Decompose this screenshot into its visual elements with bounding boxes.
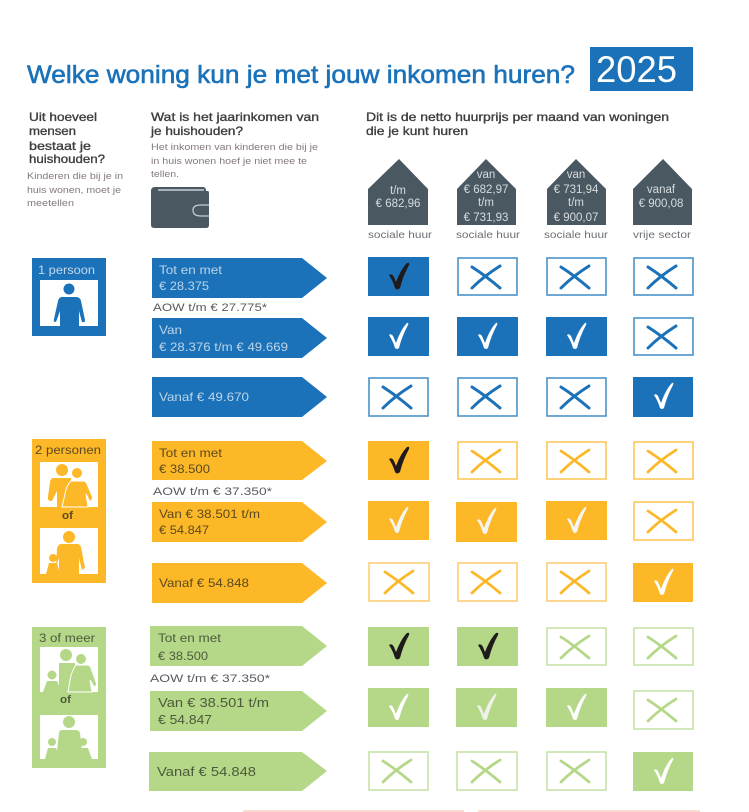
cell: check: [368, 627, 429, 666]
house: rent up to 682,96: [368, 159, 433, 241]
income arrow: blue 28.376 to 49.669: [152, 318, 327, 358]
column heading: household size: Kinderen die bij je in: [27, 171, 123, 182]
column heading: household size: Uit hoeveel: [29, 110, 97, 124]
house: rent 731,94 to 900,07: € 900,07: [554, 212, 598, 224]
panel: 1 persoon: [32, 258, 106, 336]
house: rent up to 682,96: € 682,96: [376, 198, 420, 210]
house: rent 731,94 to 900,07: € 731,94: [554, 184, 599, 196]
column heading: yearly income: [150, 110, 319, 180]
income arrow: orange up to 38.500: € 38.500: [159, 462, 210, 476]
orange row 1 marks: [368, 441, 693, 480]
cell: check: [546, 317, 607, 356]
column heading: household size: huis wonen, moet je: [27, 185, 121, 196]
house: rent 682,97 to 731,93: [456, 159, 521, 241]
house: rent up to 682,96: t/m: [390, 185, 406, 197]
column heading: yearly income: Wat is het jaarinkomen van: [151, 110, 319, 124]
house: rent from 900,08: vanaf: [647, 184, 676, 196]
cell: cross: [369, 563, 429, 601]
house: rent 731,94 to 900,07: [544, 159, 609, 241]
cell: cross: [457, 752, 517, 790]
income arrow: orange 38.501 to 54.847: Van € 38.501 t/m: [159, 507, 260, 521]
panel: 2 personen: of: [62, 510, 73, 522]
cell: check: [368, 441, 429, 480]
blue row 1 marks: [368, 257, 693, 296]
cell: cross: [634, 502, 693, 540]
cell: check: [368, 317, 429, 356]
cell: cross: [547, 378, 606, 416]
income arrow: orange from 54.848: Vanaf € 54.848: [159, 576, 249, 590]
income arrow: green 38.501 to 54.847: [150, 691, 327, 731]
column heading: household size: [27, 110, 123, 209]
cell: check: [546, 688, 607, 727]
column heading: net rent: [366, 110, 669, 138]
cell: check: [633, 752, 693, 791]
cell: check: [633, 377, 693, 417]
cell: cross: [458, 378, 517, 416]
income arrow: blue up to 28.375: [152, 258, 327, 298]
income arrow: green up to 38.500: Tot en met: [158, 631, 222, 645]
panel: 3 of meer: of: [60, 694, 71, 706]
green row 3 marks: [369, 752, 693, 791]
house: rent 682,97 to 731,93: sociale huur: [456, 229, 521, 241]
cell: check: [546, 501, 607, 540]
orange row 2 marks: [368, 501, 693, 542]
house: rent 731,94 to 900,07: t/m: [568, 197, 584, 209]
house: rent 682,97 to 731,93: van: [477, 169, 495, 181]
cell: cross: [369, 752, 428, 790]
income arrow: blue 28.376 to 49.669: Van: [159, 323, 182, 337]
house: rent from 900,08: [633, 159, 692, 241]
income arrow: blue 28.376 to 49.669: € 28.376 t/m € 49.669: [159, 340, 288, 354]
column heading: household size: meetellen: [27, 198, 74, 209]
house: rent from 900,08: vrije sector: [633, 229, 692, 241]
income arrow: orange from 54.848: [152, 563, 327, 603]
footer panels cut off at bottom edge: [243, 810, 700, 812]
income arrow: orange 38.501 to 54.847: [152, 502, 327, 542]
column heading: yearly income: in huis wonen hoef je niet mee te: [151, 156, 307, 167]
panel: 1 persoon: 1 persoon: [38, 265, 95, 277]
house: rent 731,94 to 900,07: sociale huur: [544, 229, 609, 241]
cell: cross: [634, 691, 693, 729]
cell: check: [456, 688, 517, 727]
cell: cross: [369, 378, 428, 416]
cell: cross: [634, 258, 693, 295]
panel: 3 of meer: 3 of meer: [39, 633, 95, 645]
income arrow: green from 54.848: [149, 752, 327, 791]
income arrow: blue up to 28.375: Tot en met: [159, 263, 223, 277]
cell: cross: [458, 442, 517, 479]
column heading: household size: huishouden?: [29, 152, 105, 166]
income arrow: green 38.501 to 54.847: € 54.847: [158, 712, 212, 727]
column heading: yearly income: je huishouden?: [150, 124, 243, 138]
cell: check: [633, 563, 693, 602]
column heading: household size: mensen: [29, 124, 76, 138]
title: Welke woning kun je met jouw inkomen huren?: [27, 61, 575, 89]
cell: check: [368, 257, 429, 296]
house: rent from 900,08: € 900,08: [639, 198, 683, 210]
green row 2 marks: [368, 688, 693, 729]
green row 1 marks: [368, 627, 693, 666]
income arrow: blue up to 28.375: € 28.375: [159, 279, 209, 293]
cell: cross: [634, 318, 693, 355]
income arrow: green up to 38.500: [150, 626, 327, 666]
house: rent 682,97 to 731,93: € 682,97: [464, 184, 508, 196]
cell: cross: [547, 442, 606, 479]
column heading: household size: bestaat je: [29, 139, 91, 153]
cell: check: [368, 688, 429, 727]
cell: cross: [634, 442, 693, 479]
blue row 3 marks: [369, 377, 693, 417]
note: AOW 37.350: AOW t/m € 37.350*: [153, 486, 273, 498]
cell: cross: [634, 628, 693, 665]
house: rent 682,97 to 731,93: € 731,93: [464, 212, 508, 224]
cell: cross: [547, 628, 606, 665]
house: rent 731,94 to 900,07: van: [567, 169, 585, 181]
orange row 3 marks: [369, 563, 693, 602]
cell: check: [368, 501, 429, 540]
income arrow: orange up to 38.500: Tot en met: [159, 446, 223, 460]
income arrow: orange 38.501 to 54.847: € 54.847: [159, 523, 209, 537]
blue row 2 marks: [368, 317, 693, 356]
column heading: net rent: Dit is de netto huurprijs per maand van woningen: [366, 110, 669, 124]
icon: wallet: [151, 187, 209, 228]
cell: cross: [547, 752, 606, 790]
income arrow: orange up to 38.500: [152, 441, 327, 480]
income arrow: green from 54.848: Vanaf € 54.848: [157, 764, 256, 779]
income arrow: blue from 49.670: [152, 377, 327, 417]
cell: cross: [547, 258, 606, 295]
cell: cross: [547, 563, 606, 601]
column heading: yearly income: tellen.: [151, 169, 179, 180]
income arrow: blue from 49.670: Vanaf € 49.670: [159, 390, 249, 404]
house: rent 682,97 to 731,93: t/m: [478, 197, 494, 209]
income arrow: green 38.501 to 54.847: Van € 38.501 t/m: [158, 695, 269, 710]
cell: cross: [458, 258, 517, 295]
cell: cross: [458, 563, 517, 601]
income arrow: green up to 38.500: € 38.500: [158, 649, 208, 663]
note: AOW 27.775: AOW t/m € 27.775*: [153, 302, 268, 314]
cell: check: [456, 502, 517, 542]
panel: 3 of meer: [32, 627, 106, 768]
note: AOW 37.350: AOW t/m € 37.350*: [150, 673, 271, 685]
panel: 2 personen: 2 personen: [35, 445, 101, 457]
year badge: 2025: [596, 49, 677, 90]
column heading: yearly income: Het inkomen van kinderen die bij je: [151, 142, 318, 153]
column heading: net rent: die je kunt huren: [366, 124, 468, 138]
panel: 2 personen: [32, 439, 106, 583]
cell: check: [457, 627, 518, 666]
cell: check: [457, 317, 518, 356]
house: rent up to 682,96: sociale huur: [368, 229, 433, 241]
